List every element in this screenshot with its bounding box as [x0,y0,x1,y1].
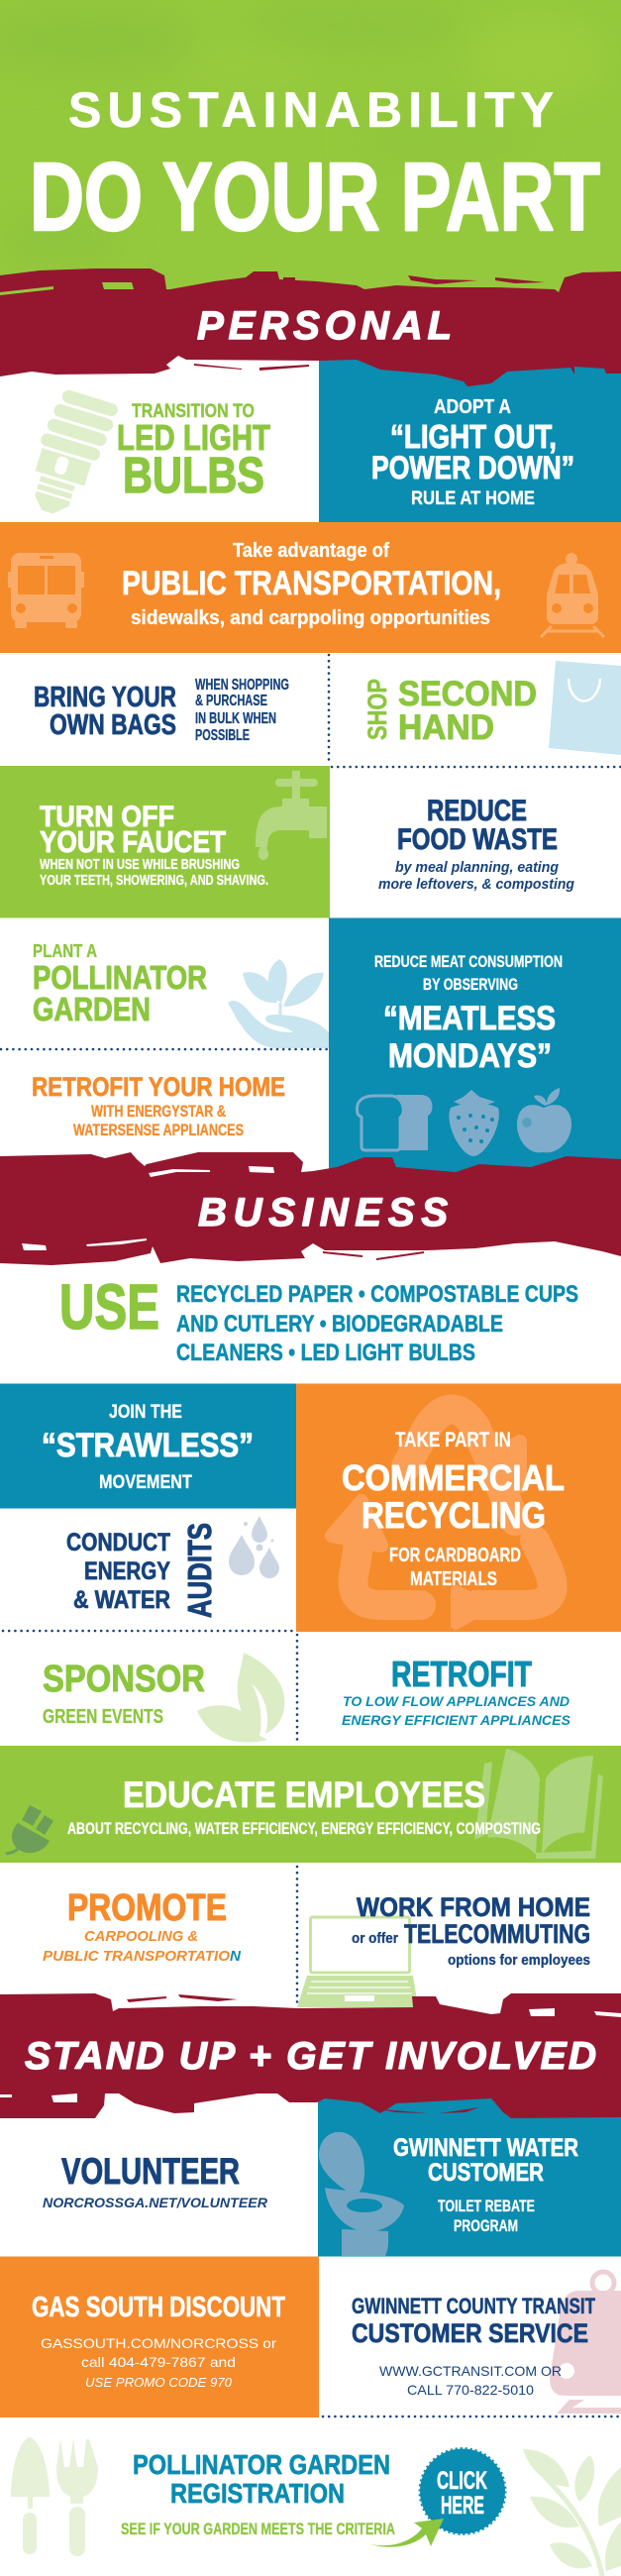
text: promote: PROMOTE [67,1887,227,1929]
text: conduct: CONDUCT [66,1529,170,1556]
banner: stand up and get involved [0,1993,621,2118]
panel: transit [352,2272,621,2414]
text: call number: call 404-479-7867 and [81,2354,236,2370]
panel: lights out [319,357,621,522]
text: turn off: TURN OFF [40,801,174,833]
panel: volunteer [43,2151,268,2210]
text: reduce meat: REDUCE MEAT CONSUMPTION [374,952,563,971]
text: customer: CUSTOMER [428,2159,544,2187]
text: gassouth url: GASSOUTH.COM/NORCROSS or [41,2335,276,2351]
text: retrofit your home: RETROFIT YOUR HOME [32,1072,285,1102]
panel: gwinnett water [318,2098,621,2257]
text: registration: REGISTRATION [170,2478,345,2509]
text: gwinnett water: GWINNETT WATER [393,2134,578,2162]
text: transition to: TRANSITION TO [132,401,255,422]
text: when shopping: IN BULK WHEN [195,710,276,727]
text: pollinator garden: POLLINATOR GARDEN [133,2449,390,2480]
icon: plug [6,1805,53,1854]
text: norcrossga: NORCROSSGA.NET/VOLUNTEER [43,2195,268,2210]
icon: train [550,2272,621,2414]
panel: meatless mondays [329,917,621,1181]
text: take part in: TAKE PART IN [395,1429,511,1451]
text: click: CLICK [437,2467,487,2495]
text: by meal planning: by meal planning, eating [395,859,559,876]
text: take advantage: Take advantage of [233,540,389,562]
text: promo code: USE PROMO CODE 970 [85,2375,233,2390]
icon: laptop [297,1917,418,2007]
text: garden: GARDEN [33,991,151,1027]
text: program: PROGRAM [454,2216,518,2235]
text: reduce: REDUCE [427,795,527,827]
panel: retrofit [342,1654,571,1728]
text: power down: POWER DOWN” [371,450,574,485]
banner: business [0,1152,621,1265]
text: more leftovers: more leftovers, & composting [378,876,574,893]
text: by observing: BY OBSERVING [423,975,518,994]
text: work from home: WORK FROM HOME [357,1892,590,1922]
text: meatless: “MEATLESS [383,1000,556,1037]
text: here: HERE [441,2492,484,2520]
panel: use [59,1271,578,1366]
panel: pollinator garden [33,941,329,1048]
text: volunteer: VOLUNTEER [61,2151,240,2192]
title: sustainability: SUSTAINABILITY [68,82,554,138]
panel: work from home [297,1892,590,2007]
icon: bulb [21,386,120,523]
panel: strawless [0,1383,296,1508]
text: low flow: TO LOW FLOW APPLIANCES AND [343,1693,569,1709]
text: your teeth: YOUR TEETH, SHOWERING, AND SHAVING. [40,872,268,889]
arrow: to badge [370,2519,444,2547]
icon: recycle [332,1409,553,1625]
icon: fork [56,2439,98,2556]
text: public transportation: PUBLIC TRANSPORTATION, [122,565,501,602]
text: mondays: MONDAYS” [388,1037,552,1075]
text: join the: JOIN THE [109,1402,182,1423]
panel: public transportation [0,522,621,653]
text: rule at home: RULE AT HOME [411,488,535,509]
panel: header [0,0,621,307]
text: for cardboard: FOR CARDBOARD [389,1545,521,1566]
icon: bag [549,661,621,755]
text: bulbs: BULBS [123,447,264,503]
text: sponsor: SPONSOR [43,1659,205,1700]
text: when shopping: WHEN SHOPPING [195,677,289,694]
panel: promote [43,1887,242,1965]
text: gas south discount: GAS SOUTH DISCOUNT [32,2292,285,2323]
panel: faucet [0,766,330,917]
banner: personal [0,268,621,386]
panel: pollinator registration [11,2437,621,2576]
icon: hand and plant [228,959,329,1048]
panel: educate employees [0,1746,621,1863]
text: when shopping: POSSIBLE [195,727,250,744]
text: hand: HAND [398,708,494,747]
icon: train [541,553,604,637]
text: green events: GREEN EVENTS [43,1706,163,1728]
text: cleaners: CLEANERS • LED LIGHT BULBS [176,1340,475,1366]
text: see if: SEE IF YOUR GARDEN MEETS THE CRITERIA [121,2520,395,2538]
icon: trowel [11,2437,50,2554]
text: led light: LED LIGHT [117,417,270,458]
text: toilet rebate: TOILET REBATE [438,2197,535,2215]
text: when shopping [195,677,289,744]
heading: business: BUSINESS [198,1191,448,1234]
text: bring your: BRING YOUR [34,682,176,713]
badge: click here [420,2449,505,2534]
icon: faucet [256,771,327,860]
text: recycling: RECYCLING [362,1495,546,1536]
text: and cutlery: AND CUTLERY • BIODEGRADABLE [176,1311,503,1338]
panel: light bulbs [0,357,319,523]
text: or offer: or offer [352,1930,398,1947]
text: materials: MATERIALS [410,1568,497,1590]
text: website: WWW.GCTRANSIT.COM OR [379,2363,562,2379]
icon: bus [8,553,84,628]
panel: commercial recycling [296,1383,621,1632]
text: retrofit: RETROFIT [391,1654,532,1694]
text: adopt a: ADOPT A [434,396,511,418]
panel: gas south [0,2257,319,2417]
text: sidewalks: sidewalks, and carppoling opportunities [131,607,490,629]
icon: bread [357,1095,432,1150]
icon: strawberry [449,1090,499,1156]
text: watersense: WATERSENSE APPLIANCES [73,1121,244,1139]
icon: toilet [319,2132,404,2256]
text: use: USE [59,1271,159,1342]
icon: apple [517,1088,571,1152]
text: light out: “LIGHT OUT, [390,418,557,455]
text: food waste: FOOD WASTE [397,823,558,856]
heading: personal: PERSONAL [197,304,452,348]
text: options: options for employees [448,1952,590,1969]
text: commercial: COMMERCIAL [342,1457,565,1498]
text: when shopping: & PURCHASE [195,693,267,709]
text: shop: SHOP [362,679,392,740]
panel: retrofit home [32,1072,285,1139]
text: audits: AUDITS [181,1523,218,1618]
text: pollinator: POLLINATOR [33,959,207,996]
panel: audits [66,1516,279,1618]
text: strawless: “STRAWLESS” [42,1427,254,1464]
text: energy efficient: ENERGY EFFICIENT APPLIANCES [342,1712,571,1728]
text: second: SECOND [398,675,537,713]
text: educate employees: EDUCATE EMPLOYEES [123,1774,485,1815]
text: and water: & WATER [73,1586,170,1614]
panel: second hand [362,661,621,755]
text: energy: ENERGY [84,1557,170,1585]
text: phone: CALL 770-822-5010 [407,2382,534,2398]
icon: drops [229,1516,279,1578]
panel: sponsor [43,1653,284,1742]
icon: plant [523,2449,621,2576]
icon: leaves [197,1653,284,1742]
text: customer service: CUSTOMER SERVICE [352,2318,588,2348]
text: public transportation small: PUBLIC TRANSPORTATION [43,1948,242,1965]
text: plant a: PLANT A [33,941,97,961]
text: carpooling: CARPOOLING & [84,1928,198,1945]
heading: stand up: STAND UP + GET INVOLVED [25,2035,596,2078]
panel: bring bags [34,677,289,744]
panel: food waste [378,795,574,893]
text: your faucet: YOUR FAUCET [40,824,226,859]
text: with energystar: WITH ENERGYSTAR & [91,1102,226,1121]
icon: book [474,1749,603,1859]
text: own bags: OWN BAGS [50,709,176,741]
text: movement: MOVEMENT [99,1472,192,1493]
text: when not in use: WHEN NOT IN USE WHILE BRUSHING [40,856,240,873]
